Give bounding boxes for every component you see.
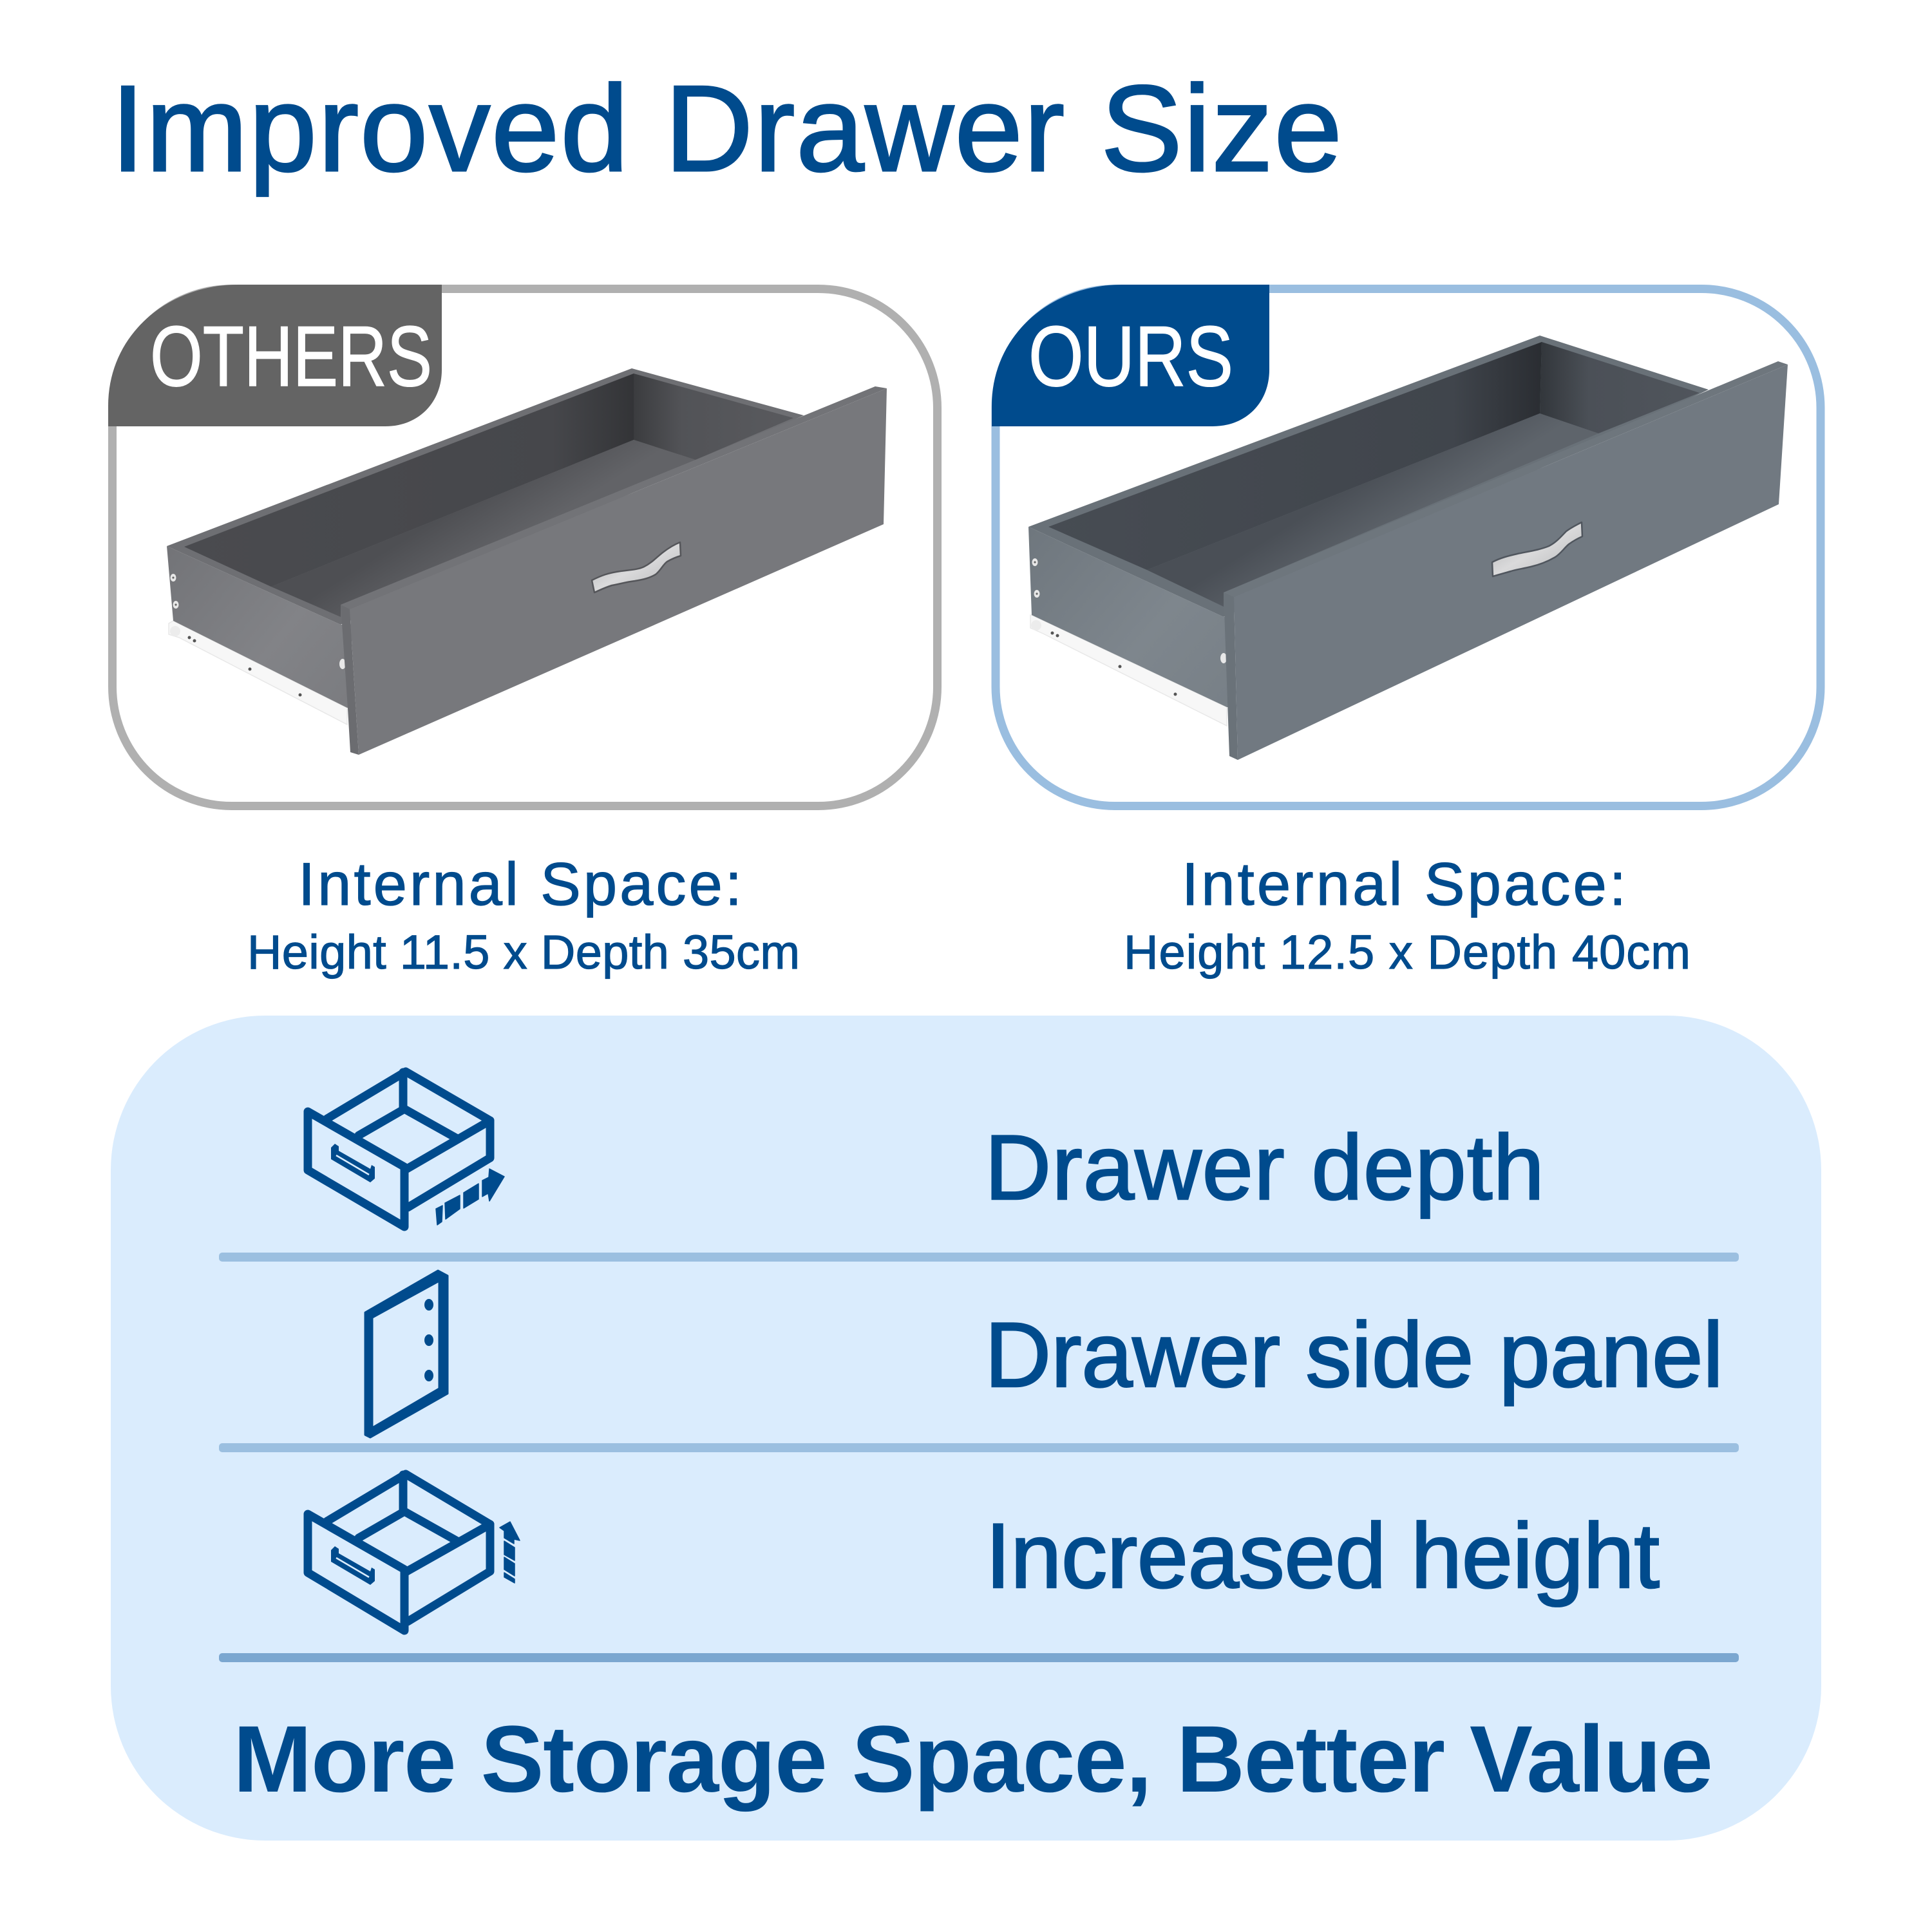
icon: increased height [308,1474,520,1631]
badge: ours: OURS [1028,309,1233,404]
panel outline: others [112,289,938,806]
caption: ours [1124,850,1690,979]
caption: ours: Height 12.5 x Depth 40cm [1124,925,1690,979]
caption: ours: Internal Space: [1182,850,1626,918]
panel outline: ours [996,289,1821,806]
icon: side panel [365,1271,448,1437]
panel: ours [992,285,1821,806]
panel background [111,1016,1821,1841]
title: Improved Drawer Size [111,61,1342,197]
badge: others: OTHERS [150,309,432,404]
row label: drawer depth: Drawer depth [985,1117,1544,1219]
panel: features [111,1016,1821,1841]
badge: others [108,285,442,426]
drawer photo: ours [1028,336,1788,760]
panel: others [108,285,938,806]
tagline: More Storage Space, Better Value [233,1707,1713,1812]
caption: others: Internal Space: [298,850,742,918]
badge: ours [992,285,1269,426]
row label: increased height: Increased height [985,1505,1660,1607]
drawer photo: others [167,368,887,755]
icon: drawer depth [308,1072,504,1227]
caption: others: Height 11.5 x Depth 35cm [247,925,800,979]
caption: others [247,850,800,979]
row label: side panel: Drawer side panel [985,1304,1723,1406]
